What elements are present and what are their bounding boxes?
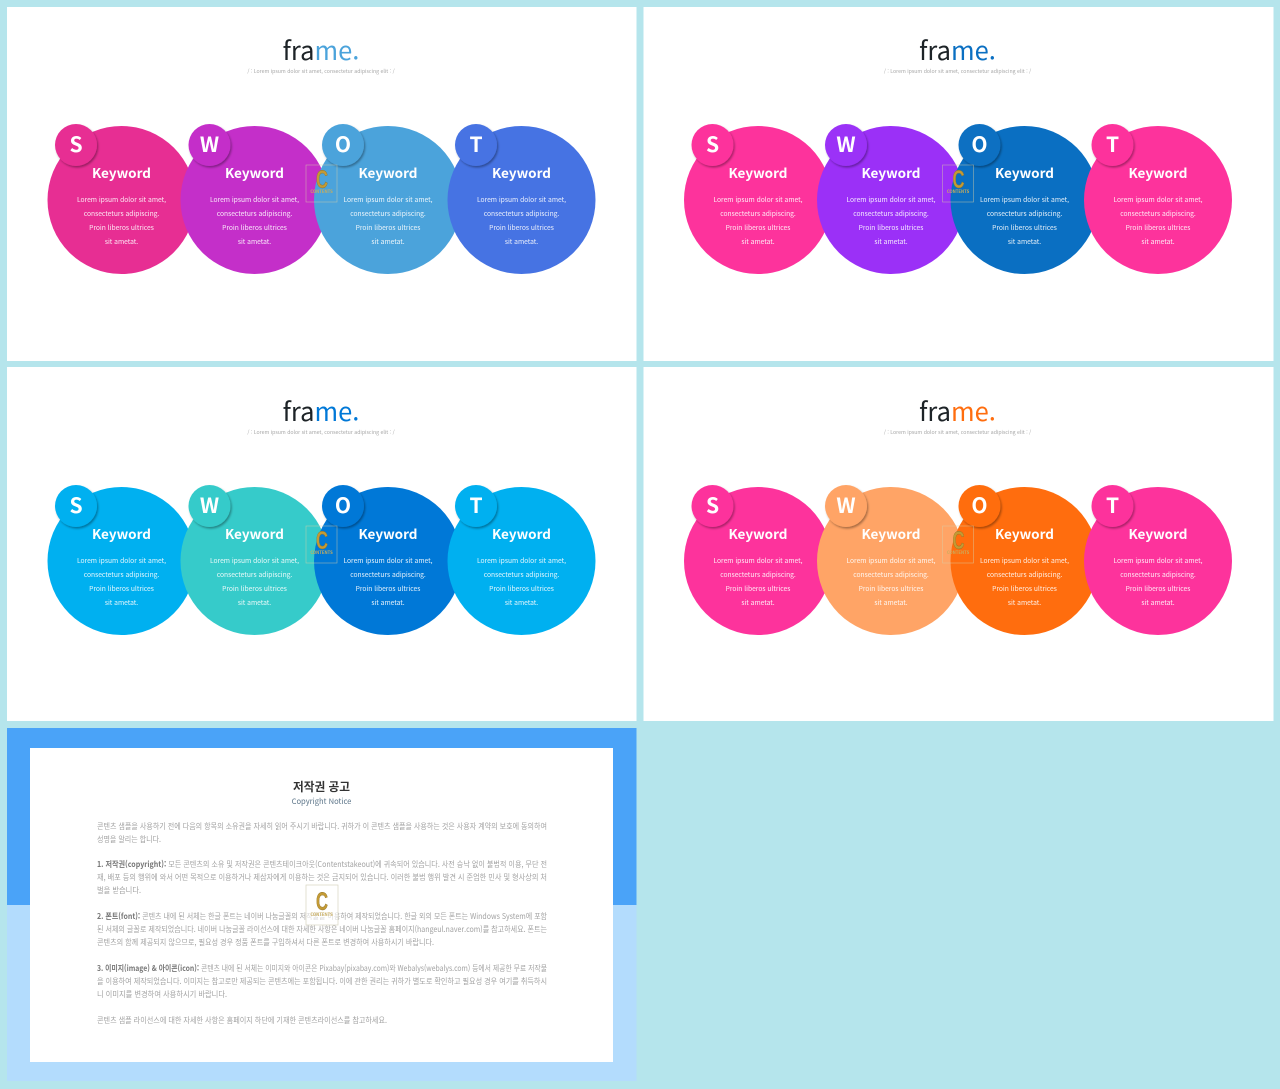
card: S: consecteturs adipiscing. <box>720 208 796 218</box>
watermark: C <box>316 527 328 555</box>
card: T <box>448 485 596 635</box>
card: O <box>950 485 1098 635</box>
card: T: sit ametat. <box>505 236 538 246</box>
card: O: consecteturs adipiscing. <box>350 208 426 218</box>
notice heading: 저작권 공고 <box>293 778 350 795</box>
card: S: consecteturs adipiscing. <box>84 208 159 218</box>
card: T: consecteturs adipiscing. <box>484 208 559 218</box>
card: O: Lorem ipsum dolor sit amet, <box>343 194 433 204</box>
card: T: Keyword <box>492 162 551 182</box>
card: S: Lorem ipsum dolor sit amet, <box>77 194 166 204</box>
card: T: sit ametat. <box>1141 236 1175 246</box>
card: S: sit ametat. <box>741 236 775 246</box>
card: S: Keyword <box>92 523 151 543</box>
card: O: sit ametat. <box>1008 236 1041 246</box>
card: S <box>684 485 832 635</box>
card: O <box>950 124 1098 274</box>
watermark: C <box>952 166 964 194</box>
notice body text: 1. 저작권(copyright): 모든 콘텐츠의 소유 및 저작권은 콘텐츠테이크아웃(Contentstakeout)에 귀속되어 있습니다. 사전 승낙 없이 불법적 이용, 무단 전 <box>97 859 547 870</box>
notice body text: 콘텐츠 샘플 라이선스에 대한 자세한 사항은 홈페이지 하단에 기재한 콘텐츠라이선스를 참고하세요. <box>97 1015 387 1026</box>
card: W: W <box>836 490 856 520</box>
notice body text <box>97 821 548 1026</box>
card: W: sit ametat. <box>238 236 271 246</box>
card: T: Lorem ipsum dolor sit amet, <box>1113 555 1203 565</box>
panel: SWOT slide, magenta and blue theme <box>7 7 636 361</box>
card: O: Proin liberos ultrices <box>992 583 1057 593</box>
card: W: Proin liberos ultrices <box>859 583 923 593</box>
card: S: consecteturs adipiscing. <box>720 569 796 579</box>
card: O: sit ametat. <box>371 597 405 607</box>
card: O: Keyword <box>995 162 1054 182</box>
title: frame. <box>919 31 996 68</box>
card: O: consecteturs adipiscing. <box>350 569 426 579</box>
card: S <box>48 485 196 635</box>
card: T <box>448 124 596 274</box>
card: W: Keyword <box>862 523 920 543</box>
card: W: Proin liberos ultrices <box>222 222 287 232</box>
card: T: Proin liberos ultrices <box>489 222 554 232</box>
subtitle: / : Lorem ipsum dolor sit amet, consectetur adipiscing elit : / <box>247 68 395 75</box>
card: O: O <box>335 490 351 520</box>
card: T: T <box>1106 129 1119 159</box>
card: W: consecteturs adipiscing. <box>217 569 292 579</box>
card: O: consecteturs adipiscing. <box>987 208 1062 218</box>
card: W: Lorem ipsum dolor sit amet, <box>846 194 936 204</box>
subtitle: / : Lorem ipsum dolor sit amet, consectetur adipiscing elit : / <box>884 68 1031 75</box>
card: S <box>684 124 832 274</box>
card: S: Proin liberos ultrices <box>726 583 790 593</box>
watermark: C <box>316 166 328 194</box>
card: T: T <box>469 129 483 159</box>
notice body text: 된 서체의 글꼴로 제작되었습니다. 네이버 나눔글꼴 라이선스에 대한 자세한 사항은 네이버 나눔글꼴 홈페이지(hangeul.naver.com)를 참고하세요. 폰트는 <box>97 924 547 935</box>
card: W: Keyword <box>225 523 284 543</box>
notice body text: 2. 폰트(font): 콘텐츠 내에 된 서체는 한글 폰트는 네이버 나눔글꼴의 저작물을 이용하여 제작되었습니다. 한글 외의 모든 폰트는 Windows System에 포함 <box>97 911 548 922</box>
card: S: Proin liberos ultrices <box>89 583 154 593</box>
panel: copyright notice <box>7 728 636 1081</box>
watermark: CONTENTS <box>310 912 333 918</box>
subtitle: / : Lorem ipsum dolor sit amet, consectetur adipiscing elit : / <box>884 429 1031 436</box>
card: W: consecteturs adipiscing. <box>853 569 929 579</box>
watermark: CONTENTS <box>310 550 333 556</box>
card: W: Proin liberos ultrices <box>222 583 287 593</box>
card: T: sit ametat. <box>505 597 538 607</box>
card: S: Lorem ipsum dolor sit amet, <box>77 555 166 565</box>
card: O: Proin liberos ultrices <box>356 583 420 593</box>
card: O: Keyword <box>358 523 418 543</box>
title: frame. <box>919 392 996 429</box>
card: S: S <box>706 490 719 520</box>
card: T: Proin liberos ultrices <box>1126 583 1190 593</box>
card: T: consecteturs adipiscing. <box>1120 208 1196 218</box>
card: O: sit ametat. <box>371 236 405 246</box>
card: W: sit ametat. <box>238 597 271 607</box>
card: W: W <box>200 129 219 159</box>
card: W <box>817 124 965 274</box>
card: T: Lorem ipsum dolor sit amet, <box>1113 194 1203 204</box>
card: S: consecteturs adipiscing. <box>84 569 159 579</box>
card: T: T <box>469 490 483 520</box>
card: S: sit ametat. <box>741 597 775 607</box>
notice body text: 벌을 받습니다. <box>97 885 141 896</box>
card: W: Lorem ipsum dolor sit amet, <box>846 555 936 565</box>
card: W: Lorem ipsum dolor sit amet, <box>210 194 299 204</box>
notice body text: 을 이용하여 제작되었습니다. 이미지는 참고로만 제공되는 콘텐츠에는 포함됩니다. 이에 관한 권리는 귀하가 별도로 확인하고 필요성 경우 여기를 취득하시 <box>97 976 547 987</box>
card: O: Keyword <box>995 523 1054 543</box>
card: W: Proin liberos ultrices <box>859 222 923 232</box>
card: T: Lorem ipsum dolor sit amet, <box>477 194 566 204</box>
card: W: Keyword <box>862 162 920 182</box>
card: W: consecteturs adipiscing. <box>217 208 292 218</box>
notice body text: 3. 이미지(image) & 아이콘(icon): 콘텐츠 내에 된 서체는 이미지와 아이콘은 Pixabay(pixabay.com)와 Webalys(webalys.com) 등에서 제공한 무료 저작물 <box>97 963 547 974</box>
card: O: Keyword <box>358 162 418 182</box>
card: T <box>1084 485 1232 635</box>
panel: SWOT slide, cyan and teal theme <box>7 367 636 721</box>
card: W <box>180 124 328 274</box>
card: O <box>314 124 462 274</box>
card: O: O <box>971 490 988 520</box>
notice body text: 콘텐츠 샘플을 사용하기 전에 다음의 항목의 소유권을 자세히 읽어 주시기 바랍니다. 귀하가 이 콘텐츠 샘플을 사용하는 것은 사용자 계약의 보호에 동의하여 <box>97 821 547 832</box>
watermark <box>942 165 974 202</box>
card: O: Proin liberos ultrices <box>356 222 420 232</box>
card: T: Keyword <box>492 523 551 543</box>
watermark <box>306 885 338 925</box>
card: T: Keyword <box>1128 162 1188 182</box>
card: O: O <box>335 129 351 159</box>
card: S: Keyword <box>728 162 788 182</box>
card: S: S <box>706 129 719 159</box>
card: W: consecteturs adipiscing. <box>853 208 929 218</box>
notice body text: 콘텐츠의 함께 제공되지 않으므로, 필요성 경우 정품 폰트를 구입하셔서 다른 폰트로 변경하여 사용하시기 바랍니다. <box>97 937 434 948</box>
subtitle: / : Lorem ipsum dolor sit amet, consectetur adipiscing elit : / <box>247 429 395 436</box>
card: O: Lorem ipsum dolor sit amet, <box>343 555 433 565</box>
card: T: consecteturs adipiscing. <box>484 569 559 579</box>
watermark <box>306 526 337 563</box>
card: W: W <box>836 129 856 159</box>
card: S: S <box>69 129 83 159</box>
watermark: CONTENTS <box>947 550 970 556</box>
card: S: Proin liberos ultrices <box>726 222 790 232</box>
card: W: Lorem ipsum dolor sit amet, <box>210 555 299 565</box>
panel: SWOT slide, pink and purple theme <box>644 7 1274 361</box>
card: W: sit ametat. <box>874 236 908 246</box>
watermark: CONTENTS <box>947 189 970 195</box>
card: T: T <box>1106 490 1119 520</box>
card: W: W <box>200 490 219 520</box>
card: S: sit ametat. <box>105 236 138 246</box>
card: O <box>314 485 462 635</box>
card: O: sit ametat. <box>1008 597 1041 607</box>
card: T: Proin liberos ultrices <box>489 583 554 593</box>
card: O: O <box>971 129 988 159</box>
watermark <box>306 165 337 202</box>
card: O: Proin liberos ultrices <box>992 222 1057 232</box>
card: W: sit ametat. <box>874 597 908 607</box>
card: T: Lorem ipsum dolor sit amet, <box>477 555 566 565</box>
card: T: Keyword <box>1128 523 1188 543</box>
card: T: Proin liberos ultrices <box>1126 222 1190 232</box>
card: O: consecteturs adipiscing. <box>987 569 1062 579</box>
watermark <box>942 526 974 563</box>
card: S: Proin liberos ultrices <box>89 222 154 232</box>
card: S: S <box>69 490 83 520</box>
title: frame. <box>283 392 359 429</box>
card: W <box>180 485 328 635</box>
notice body text: 재, 배포 등의 행위에 와서 어떤 목적으로 이용하거나 제삼자에게 이용하는 것은 금지되어 있습니다. 이러한 불법 행위 발견 시 준엄한 민사 및 형사상의 처 <box>97 872 547 883</box>
card: S: Lorem ipsum dolor sit amet, <box>713 194 803 204</box>
notice body text: 성명을 알리는 합니다. <box>97 834 161 845</box>
card: S: sit ametat. <box>105 597 138 607</box>
card: S: Lorem ipsum dolor sit amet, <box>713 555 803 565</box>
card: W <box>817 485 965 635</box>
card: S <box>48 124 196 274</box>
watermark: C <box>952 527 964 555</box>
watermark: C <box>316 888 328 916</box>
notice subheading: Copyright Notice <box>292 796 351 807</box>
watermark: CONTENTS <box>310 189 333 195</box>
card: S: Keyword <box>728 523 788 543</box>
card: T <box>1084 124 1232 274</box>
panel: SWOT slide, pink and orange theme <box>644 367 1274 721</box>
card: S: Keyword <box>92 162 151 182</box>
card: T: consecteturs adipiscing. <box>1120 569 1196 579</box>
card: O: Lorem ipsum dolor sit amet, <box>980 194 1069 204</box>
title: frame. <box>283 31 359 68</box>
card: O: Lorem ipsum dolor sit amet, <box>980 555 1069 565</box>
card: T: sit ametat. <box>1141 597 1175 607</box>
notice body text: 니 이미지를 변경하여 사용하시기 바랍니다. <box>97 989 227 1000</box>
card: W: Keyword <box>225 162 284 182</box>
